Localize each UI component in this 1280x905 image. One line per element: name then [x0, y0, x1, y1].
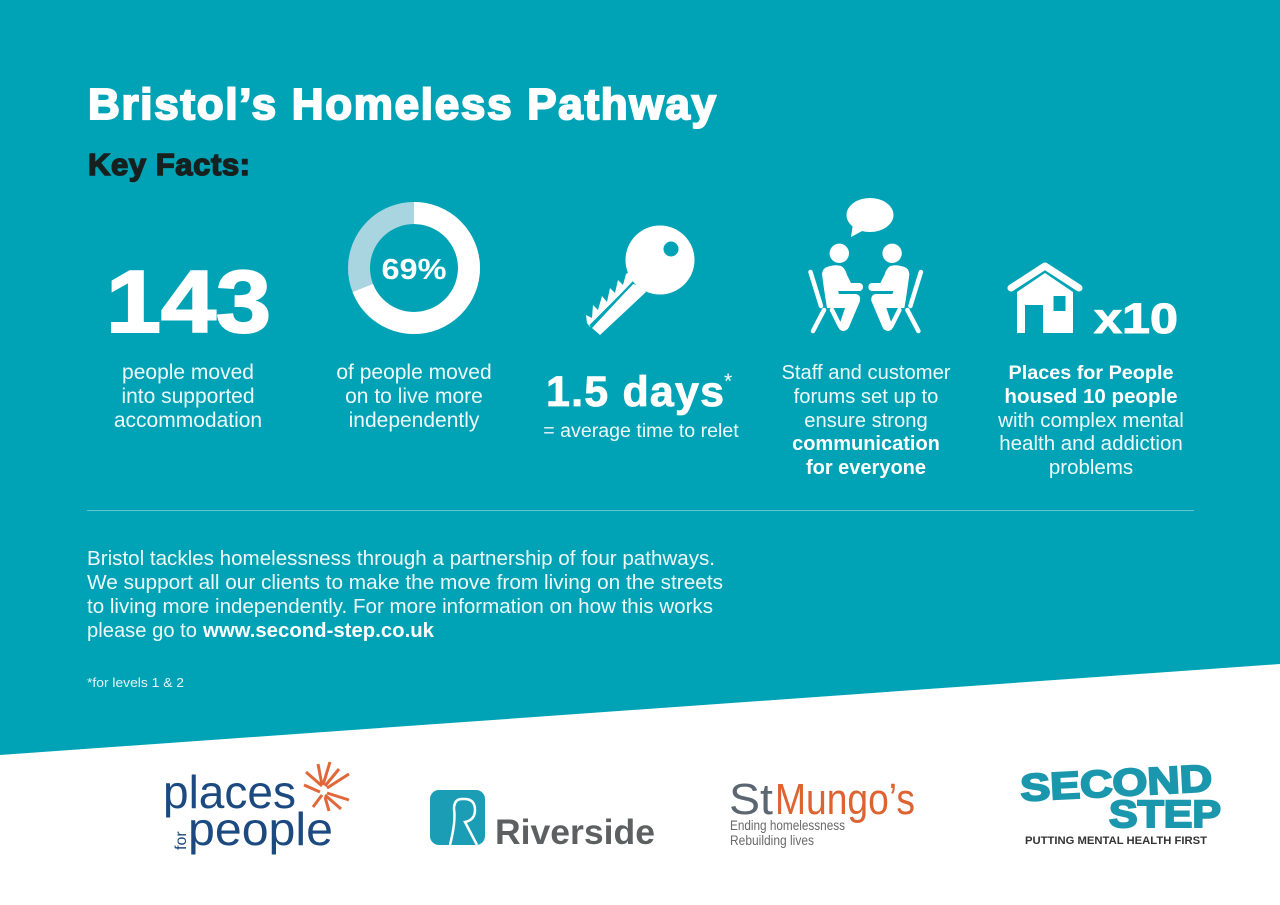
- text: places for people: with complex mental: [997, 409, 1184, 432]
- text: moved on: independently: [349, 409, 480, 432]
- text: places for people: Places for People: [1009, 362, 1173, 384]
- logo: places for people: [163, 762, 349, 855]
- donut chart: 69%: 69%: [382, 254, 447, 286]
- title: Bristol’s Homeless Pathway: [88, 80, 717, 129]
- icon: two people talking: [810, 198, 921, 331]
- text: places for people: health and addiction: [999, 432, 1183, 455]
- paragraph: please go to: [87, 619, 197, 642]
- logo: st mungo's: St: [729, 775, 773, 824]
- label: x10: x10: [1094, 295, 1178, 343]
- logo: places for people: places: [163, 766, 296, 818]
- paragraph: to living more independently. For more information on how this works: [87, 595, 713, 618]
- paragraph: We support all our clients to make the move from living on the streets: [87, 571, 723, 594]
- number: 143: 143: [106, 252, 271, 351]
- text: people moved: into supported: [121, 385, 255, 408]
- text: forums: for everyone: [806, 457, 926, 479]
- logo: st mungo's: Rebuilding lives: [730, 833, 814, 848]
- text: moved on: of people moved: [336, 361, 492, 384]
- text: forums: Staff and customer: [781, 362, 951, 384]
- paragraph: Bristol tackles homelessness through a partnership of four pathways.: [87, 547, 715, 570]
- logo: places for people: for: [173, 831, 190, 850]
- logo: second step: STEP: [1109, 794, 1221, 836]
- logo: second step: [1019, 758, 1221, 847]
- number: 1.5 days: 1.5 days: [546, 368, 724, 416]
- text: forums: ensure strong: [804, 410, 928, 432]
- logo: second step: PUTTING MENTAL HEALTH FIRST: [1025, 835, 1207, 847]
- text: people moved: accommodation: [114, 409, 262, 432]
- logo: places for people: people: [188, 803, 333, 855]
- text: relet: = average time to relet: [543, 420, 739, 442]
- text: moved on: on to live more: [345, 385, 483, 408]
- logo: second step: SECOND: [1019, 758, 1213, 810]
- footnote: *for levels 1 & 2: [87, 675, 184, 690]
- logo: st mungo's: Mungo’s: [775, 775, 915, 824]
- asterisk: *: [724, 370, 732, 393]
- fact: 143 people moved: [106, 252, 271, 432]
- logo: riverside: [430, 790, 655, 852]
- fact: forums: [781, 198, 951, 479]
- icon: key: [586, 226, 694, 335]
- icon: house: [1011, 266, 1079, 333]
- text: places for people: problems: [1049, 456, 1133, 479]
- text: places for people: housed 10 people: [1004, 385, 1178, 408]
- subheading: key facts: Key Facts:: [88, 147, 250, 182]
- fact: 1.5 days: [543, 226, 739, 442]
- text: forums: communication: [792, 433, 940, 455]
- fact: 69%: [336, 213, 492, 432]
- logo: riverside: Riverside: [495, 813, 655, 852]
- paragraph: www.second-step.co.uk: [202, 619, 435, 642]
- text: people moved: people moved: [122, 361, 254, 384]
- logo: st mungo's: [729, 775, 915, 848]
- fact: x10: [997, 266, 1184, 479]
- donut chart: 69%: [359, 213, 469, 323]
- text: forums: forums set up to: [794, 386, 938, 408]
- logo: st mungo's: Ending homelessness: [730, 818, 845, 833]
